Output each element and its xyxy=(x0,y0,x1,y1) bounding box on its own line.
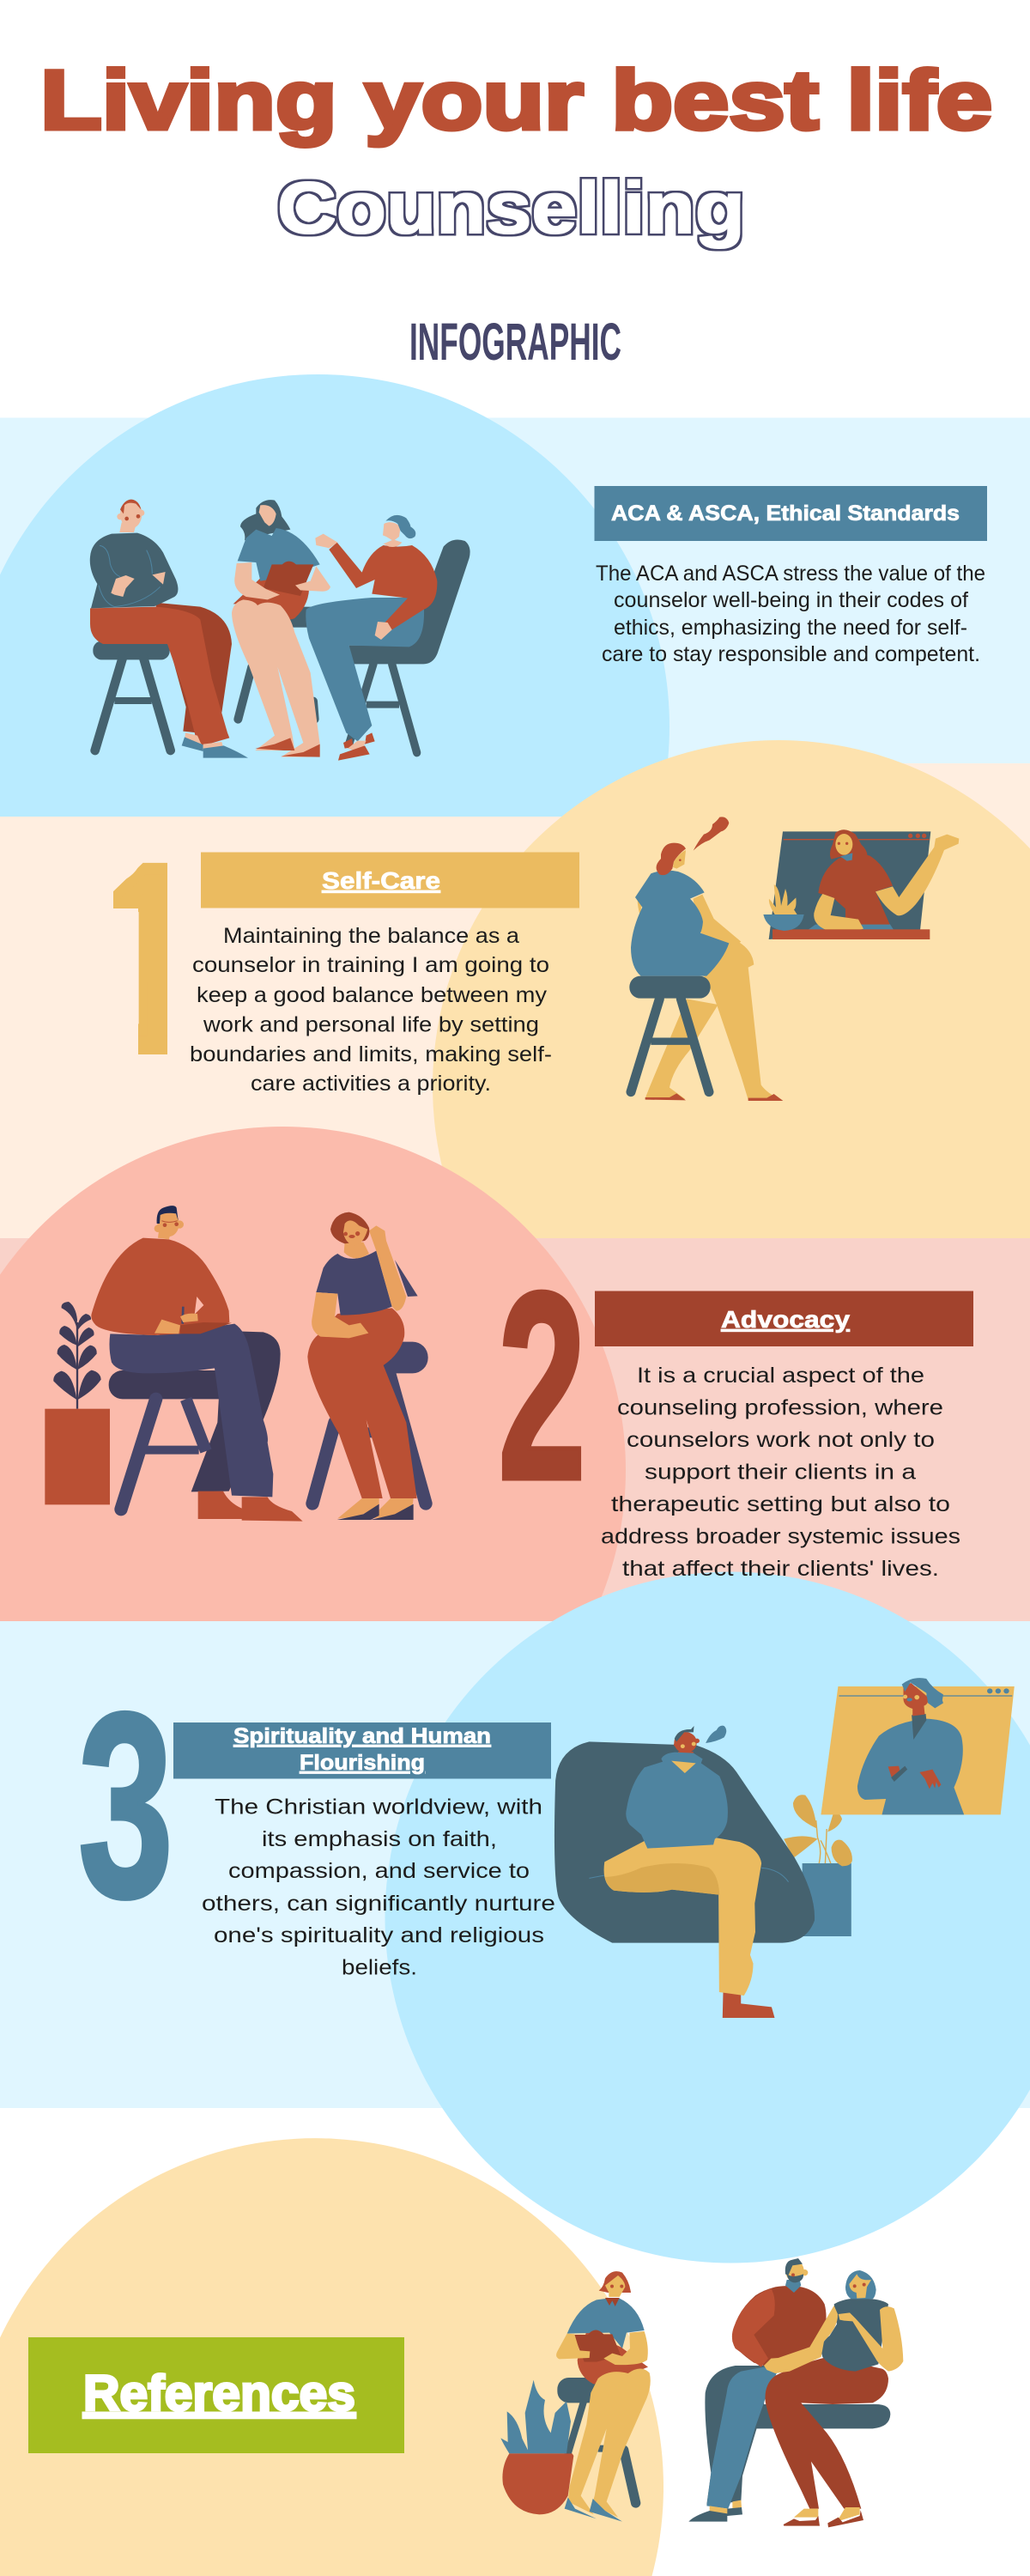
woman's top xyxy=(316,1251,418,1315)
client dress xyxy=(631,871,729,976)
man's head xyxy=(117,500,144,532)
text block: spirituality body xyxy=(202,1795,555,1980)
heading: self-care: Self-Care xyxy=(322,867,440,894)
woman's head xyxy=(599,2271,631,2306)
man's shoes xyxy=(182,732,248,758)
woman with clipboard: blouse xyxy=(238,528,320,581)
woman with clipboard: hair xyxy=(240,500,290,540)
woman with clipboard: legs xyxy=(232,599,320,757)
text block: self-care body: boundaries and limits, making self- xyxy=(190,1042,552,1066)
desk xyxy=(772,929,930,939)
seated woman: hand and head xyxy=(315,515,415,640)
woman's trousers xyxy=(765,2357,888,2509)
references button: References xyxy=(83,2366,355,2421)
man's shoes xyxy=(688,2500,742,2522)
man's head xyxy=(785,2258,808,2293)
text block: ACA and ASCA body: ethics, emphasizing the need for self- xyxy=(614,616,967,640)
heading: ACA and ASCA: ACA & ASCA, Ethical Standards xyxy=(611,501,960,526)
illustration: man and woman in conversation xyxy=(45,1206,428,1522)
section: ACA and ASCA ethical standards xyxy=(594,486,987,666)
text block: advocacy body: It is a crucial aspect of the xyxy=(637,1364,924,1388)
speech drop xyxy=(706,1726,726,1743)
woman's hair and face xyxy=(845,2270,876,2299)
circle: spirituality backdrop xyxy=(385,1571,1030,2263)
speech squiggle xyxy=(694,817,729,851)
heading: advocacy: Advocacy xyxy=(721,1306,850,1333)
text block: spirituality body: beliefs. xyxy=(342,1956,417,1980)
potted plant xyxy=(45,1302,110,1504)
text block: advocacy body: counselors work not only to xyxy=(627,1428,935,1452)
seated woman: jumper xyxy=(329,543,437,629)
woman's arm around man xyxy=(764,2306,838,2373)
subtitle: Counselling xyxy=(277,167,745,248)
illustration: woman with plant and seated couple xyxy=(500,2258,903,2527)
references button xyxy=(28,2337,404,2453)
heading: self-care xyxy=(201,852,579,908)
illustration: three people seated xyxy=(90,500,470,761)
number 2: 2 xyxy=(498,1237,586,1536)
circle: ethical standards backdrop xyxy=(0,374,670,817)
text block: spirituality body: compassion, and service to xyxy=(228,1859,530,1883)
woman's arms xyxy=(312,1225,406,1338)
number 3: 3 xyxy=(78,1658,173,1952)
bench xyxy=(754,2404,890,2428)
heading: spirituality: Flourishing xyxy=(300,1751,425,1775)
man's front leg xyxy=(706,2367,777,2509)
man's sweater xyxy=(732,2286,827,2367)
chair with back xyxy=(349,539,470,753)
screen title bar xyxy=(839,1688,1012,1696)
woman's top xyxy=(821,2299,888,2372)
woman's chair xyxy=(238,607,315,720)
heading: advocacy xyxy=(595,1291,973,1346)
client shoes xyxy=(645,1093,783,1101)
text block: ACA and ASCA body xyxy=(596,562,985,666)
client head xyxy=(657,843,686,875)
man's stool xyxy=(93,641,171,750)
illustration: client on stool and counsellor on screen xyxy=(629,817,959,1101)
text block: self-care body: Maintaining the balance as a xyxy=(223,924,519,948)
seated woman: trousers xyxy=(306,598,424,741)
counsellor on screen xyxy=(857,1678,964,1814)
armchair seams xyxy=(589,1868,789,1882)
panel: ethical standards band xyxy=(0,417,1030,764)
infographic label: INFOGRAPHIC xyxy=(409,313,621,371)
circle: self-care backdrop xyxy=(433,740,1030,1238)
section: self-care xyxy=(113,852,579,1095)
text block: spirituality body: others, can significantly nurture xyxy=(202,1892,555,1916)
woman's blouse xyxy=(567,2299,645,2348)
stool xyxy=(629,942,783,1101)
man's sweater xyxy=(91,1238,229,1335)
circle: advocacy backdrop xyxy=(0,1127,626,1621)
man's sleeve xyxy=(732,2288,775,2367)
text block: self-care body: counselor in training I am going to xyxy=(192,953,549,977)
notebook and hands xyxy=(154,1297,232,1334)
text block: advocacy body: support their clients in a xyxy=(645,1460,916,1484)
man's back leg xyxy=(705,2366,766,2505)
woman with clipboard: heels xyxy=(255,738,320,757)
circle: references backdrop xyxy=(0,2138,663,2576)
woman with clipboard: arms xyxy=(234,562,330,599)
text block: self-care body: work and personal life by setting xyxy=(203,1013,539,1037)
heading: ACA and ASCA xyxy=(594,486,987,541)
text block: advocacy body: address broader systemic issues xyxy=(601,1525,960,1549)
client trousers xyxy=(604,1838,761,1996)
plant leaves xyxy=(784,1795,852,1866)
text block: spirituality body: The Christian worldview, with xyxy=(215,1795,542,1819)
man's chair xyxy=(109,1331,281,1510)
heading: spirituality xyxy=(173,1722,551,1779)
heading: spirituality: Spirituality and Human xyxy=(233,1724,491,1748)
woman's skirt xyxy=(578,2331,648,2385)
section: spirituality and human flourishing xyxy=(78,1658,555,1980)
text block: advocacy body: therapeutic setting but also to xyxy=(611,1492,950,1516)
text block: self-care body: keep a good balance between my xyxy=(197,983,548,1007)
panel: self-care band xyxy=(0,763,1030,1238)
text block: advocacy body: counseling profession, where xyxy=(617,1396,943,1420)
number 1: 1 xyxy=(100,809,203,1116)
woman's other arm xyxy=(839,2306,903,2372)
armchair xyxy=(554,1741,815,1943)
woman's feet and heels xyxy=(337,1498,414,1520)
seated woman: shoes xyxy=(338,732,375,761)
panel: advocacy band xyxy=(0,1238,1030,1621)
man's shoes xyxy=(198,1492,303,1522)
potted plant xyxy=(500,2380,573,2514)
client arm xyxy=(638,895,741,949)
text block: advocacy body: that affect their clients' lives. xyxy=(622,1557,939,1581)
man's trousers xyxy=(109,1324,273,1497)
woman's arms xyxy=(556,2331,648,2365)
chair xyxy=(557,2378,636,2503)
text block: self-care body xyxy=(190,924,552,1096)
text block: advocacy body xyxy=(601,1364,960,1581)
panel: spirituality band xyxy=(0,1621,1030,2108)
woman's trousers xyxy=(307,1308,417,1498)
plant pot xyxy=(803,1863,851,1936)
counsellor on screen xyxy=(809,829,959,931)
bowl plant xyxy=(763,884,804,931)
text block: ACA and ASCA body: The ACA and ASCA stress the value of the xyxy=(596,562,985,586)
woman's stool xyxy=(312,1342,428,1504)
woman's shoes xyxy=(565,2497,622,2522)
woman with clipboard: skirt xyxy=(233,578,309,619)
woman's legs xyxy=(568,2368,651,2518)
text block: spirituality body: one's spirituality and religious xyxy=(214,1923,544,1947)
video call screen xyxy=(769,831,930,939)
man's sweater xyxy=(90,533,178,608)
client hoodie xyxy=(626,1753,728,1849)
section: advocacy xyxy=(498,1237,973,1581)
text block: ACA and ASCA body: care to stay responsible and competent. xyxy=(602,642,980,666)
text block: spirituality body: its emphasis on faith, xyxy=(262,1827,497,1851)
text block: self-care body: care activities a priority. xyxy=(251,1072,491,1096)
man's trousers xyxy=(90,603,232,745)
woman with clipboard: clipboard xyxy=(264,562,313,596)
couple's shoes xyxy=(784,2507,863,2527)
text block: ACA and ASCA body: counselor well-being in their codes of xyxy=(614,588,968,612)
man's head xyxy=(154,1206,184,1239)
client boot xyxy=(723,1992,774,2018)
title: Living your best life xyxy=(40,53,992,147)
video call screen xyxy=(821,1686,1015,1814)
illustration: client on armchair and counsellor on screen xyxy=(554,1678,1015,2018)
woman with clipboard: face xyxy=(259,505,276,526)
client head xyxy=(674,1726,700,1762)
clipboard xyxy=(573,2330,621,2362)
woman's head xyxy=(330,1212,369,1258)
